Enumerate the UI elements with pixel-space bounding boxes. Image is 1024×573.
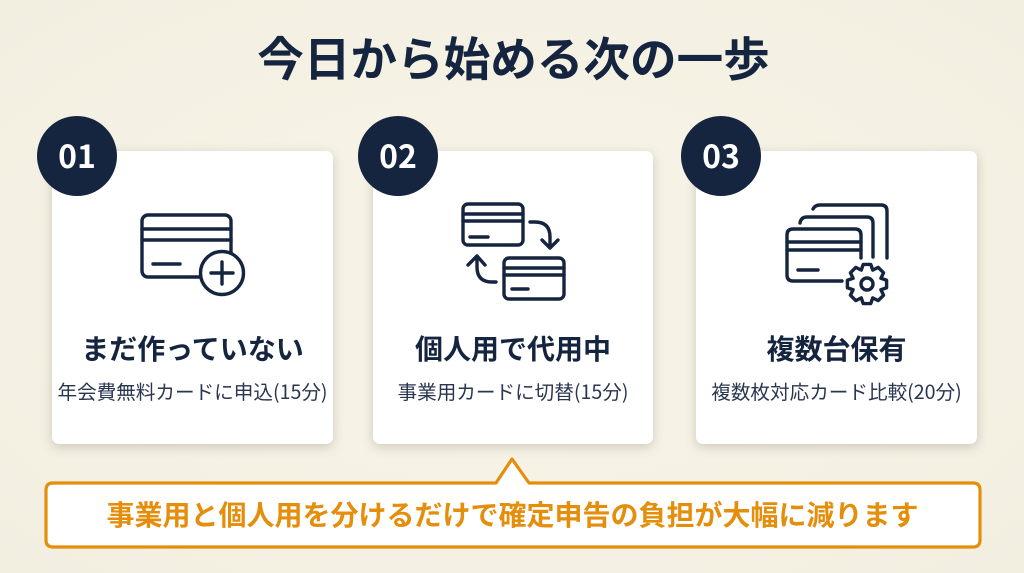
panel: card 3 (696, 151, 977, 444)
heading 2: 個人用で代用中 (415, 328, 611, 368)
badge 02: 02 (379, 132, 417, 178)
badge 01 (37, 116, 117, 196)
callout message: 事業用と個人用を分けるだけで確定申告の負担が大幅に減ります (106, 494, 918, 534)
card 1 text (57, 328, 328, 405)
panel: card 2 (373, 151, 653, 444)
description 1: 年会費無料カードに申込(15分) (57, 376, 328, 405)
badge 01: 01 (58, 132, 96, 178)
title: 今日から始める次の一歩 (257, 23, 770, 90)
badge 02 (358, 116, 438, 196)
heading 1: まだ作っていない (81, 328, 304, 368)
card 2 text (398, 328, 628, 405)
badge 03 (681, 116, 761, 196)
description 3: 複数枚対応カード比較(20分) (711, 376, 962, 405)
description 2: 事業用カードに切替(15分) (398, 376, 628, 405)
panel: card 1 (52, 151, 333, 444)
badge 03: 03 (702, 132, 740, 178)
card 3 text (711, 328, 962, 405)
heading 3: 複数台保有 (766, 328, 906, 368)
